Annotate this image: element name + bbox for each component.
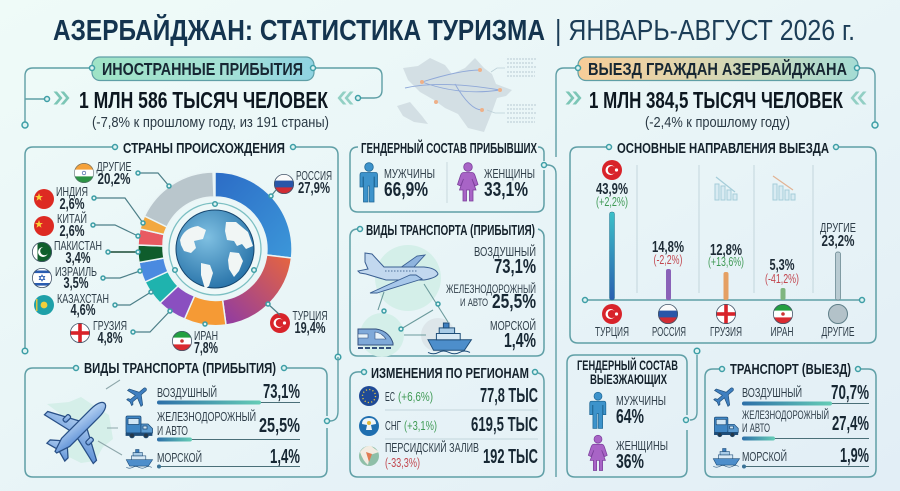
label: Georgia: 4,8% xyxy=(98,330,122,347)
label: India xyxy=(34,184,145,225)
column: Iran: 5,3% xyxy=(770,257,794,274)
label: Turkey xyxy=(266,302,328,337)
stat: sea: МОРСКОЙ xyxy=(490,318,536,333)
label: Turkey: ТУРЦИЯ xyxy=(292,308,328,323)
row: sea: 1,9% xyxy=(840,445,869,467)
row: sea: МОРСКОЙ xyxy=(742,449,787,464)
label: Russia xyxy=(269,168,332,198)
row: EU: ЕС xyxy=(385,389,395,404)
section header: foreign arrivals: 1 МЛН 586 ТЫСЯЧ ЧЕЛОВЕК xyxy=(79,87,329,113)
row: rail and road: 27,4% xyxy=(832,413,869,435)
heading: regions: ИЗМЕНЕНИЯ ПО РЕГИОНАМ xyxy=(371,366,529,382)
row: rail and road xyxy=(714,407,869,440)
label: others xyxy=(74,159,171,188)
row: EU: (+6,6%) xyxy=(398,390,433,404)
map of Azerbaijan xyxy=(397,58,536,132)
row: rail and road: И АВТО xyxy=(742,421,770,435)
row: rail and road: ЖЕЛЕЗНОДОРОЖНЫЙ xyxy=(157,409,256,424)
column: Georgia xyxy=(708,177,744,339)
column: others: ДРУГИЕ xyxy=(822,324,855,339)
row: Persian Gulf: 192 ТЫС xyxy=(483,446,538,468)
label: China: 2,6% xyxy=(60,223,84,240)
label: Kazakhstan: 4,6% xyxy=(70,302,96,319)
female stat: 36% xyxy=(616,451,644,473)
column: Turkey: ТУРЦИЯ xyxy=(595,324,629,339)
column: Georgia: 12,8% xyxy=(710,242,742,259)
heading: gender arrivals: ГЕНДЕРНЫЙ СОСТАВ ПРИБЫВШИХ xyxy=(361,139,537,157)
stat: sea: 1,4% xyxy=(504,330,536,352)
label: India: ИНДИЯ xyxy=(56,184,88,199)
panel: main departure destinations xyxy=(570,141,876,343)
label: China xyxy=(34,211,140,240)
heading: gender departing xyxy=(577,358,678,387)
panel: transport arrivals left xyxy=(25,357,338,477)
illustration: plane train ship xyxy=(358,245,471,357)
row: sea xyxy=(126,446,300,468)
column: Russia: (-2,2%) xyxy=(654,253,682,267)
row: air: ВОЗДУШНЫЙ xyxy=(742,385,802,400)
label: Pakistan: 3,4% xyxy=(66,250,90,267)
panel: gender of departing xyxy=(567,348,700,477)
male stat: МУЖЧИНЫ xyxy=(616,393,666,408)
female stat: 33,1% xyxy=(484,179,528,201)
label: Iran: ИРАН xyxy=(194,328,218,343)
female stat: ЖЕНЩИНЫ xyxy=(484,166,535,181)
male stat xyxy=(590,392,666,428)
row: CIS: 619,5 ТЫС xyxy=(471,414,538,436)
row: sea: МОРСКОЙ xyxy=(157,450,202,465)
label: Pakistan: ПАКИСТАН xyxy=(54,238,102,253)
row: rail and road xyxy=(126,409,300,442)
column: Turkey: 43,9% xyxy=(596,181,628,198)
column: others: 23,2% xyxy=(822,233,854,250)
label: Pakistan xyxy=(32,238,140,267)
heading: countries: СТРАНЫ ПРОИСХОЖДЕНИЯ xyxy=(123,141,285,157)
label: Israel xyxy=(32,264,142,292)
row: EU: 77,8 ТЫС xyxy=(480,385,538,407)
label: Georgia xyxy=(70,309,172,347)
column: Russia: РОССИЯ xyxy=(652,324,686,339)
column: Georgia: ГРУЗИЯ xyxy=(710,324,742,339)
row: Persian Gulf: (-33,3%) xyxy=(385,456,420,470)
label: others: ДРУГИЕ xyxy=(96,159,132,174)
panel: transport departures xyxy=(705,362,876,477)
section header: citizens departure xyxy=(556,57,878,157)
female stat xyxy=(458,163,535,201)
female stat xyxy=(588,435,668,473)
row: rail and road: ЖЕЛЕЗНОДОРОЖНЫЙ xyxy=(742,407,829,422)
row: air: ВОЗДУШНЫЙ xyxy=(157,385,217,400)
section header: foreign arrivals: ИНОСТРАННЫЕ ПРИБЫТИЯ xyxy=(102,59,303,79)
column: Russia xyxy=(652,239,686,339)
column: Iran: (-41,2%) xyxy=(765,272,799,286)
panel: countries of origin xyxy=(22,141,341,360)
male stat xyxy=(360,163,435,202)
label: India: 2,6% xyxy=(60,196,84,213)
column: Iran: ИРАН xyxy=(770,324,794,339)
female stat: ЖЕНЩИНЫ xyxy=(616,438,668,453)
column: Turkey xyxy=(595,160,629,339)
section header: citizens departure: (-2,4% к прошлому году) xyxy=(645,115,790,131)
stat: rail and road xyxy=(446,281,536,313)
column: Iran xyxy=(765,176,799,339)
column: others xyxy=(820,220,856,339)
label: Kazakhstan: КАЗАХСТАН xyxy=(57,291,109,306)
row: air xyxy=(710,381,869,411)
row: rail and road: 25,5% xyxy=(259,415,300,437)
panel: regional changes xyxy=(350,366,544,477)
male stat: МУЖЧИНЫ xyxy=(384,166,435,181)
stat: rail and road: И АВТО xyxy=(460,297,488,309)
label: Israel: 3,5% xyxy=(64,275,88,292)
stat: air: ВОЗДУШНЫЙ xyxy=(474,244,536,259)
row: air: 70,7% xyxy=(831,382,869,404)
heading: transport arrivals: ВИДЫ ТРАНСПОРТА (ПРИБЫТИЯ) xyxy=(84,361,276,377)
label: Georgia: ГРУЗИЯ xyxy=(93,318,127,333)
row: sea xyxy=(713,445,869,468)
icon: big plane over map xyxy=(31,379,129,477)
heading: gender departing: ВЫЕЗЖАЮЩИХ xyxy=(590,372,667,387)
heading: transport middle: ВИДЫ ТРАНСПОРТА (ПРИБЫТИЯ) xyxy=(366,223,535,239)
label: others: 20,2% xyxy=(98,171,130,188)
column: Russia: 14,8% xyxy=(652,239,684,256)
column: Turkey: (+2,2%) xyxy=(596,195,628,209)
title xyxy=(53,13,855,47)
row: CIS: (+3,1%) xyxy=(404,419,437,433)
row: CIS: СНГ xyxy=(385,418,401,433)
panel: transport arrivals middle xyxy=(350,223,544,357)
donut chart xyxy=(138,172,292,326)
column: Georgia: (+13,6%) xyxy=(708,255,744,269)
section header: foreign arrivals: (-7,8% к прошлому году, из 191 страны) xyxy=(92,115,329,131)
row: CIS xyxy=(359,414,538,436)
male stat: 64% xyxy=(616,406,644,428)
stat: air: 73,1% xyxy=(494,256,536,278)
heading: gender departing: ГЕНДЕРНЫЙ СОСТАВ xyxy=(577,358,678,373)
section header: foreign arrivals xyxy=(22,57,382,131)
row: EU xyxy=(359,385,538,407)
stat: rail and road: ЖЕЛЕЗНОДОРОЖНЫЙ xyxy=(446,281,536,296)
label: Kazakhstan xyxy=(34,290,153,319)
row: Persian Gulf xyxy=(359,440,538,470)
label: Iran xyxy=(172,322,218,357)
icon: globe xyxy=(169,202,261,295)
label: Russia: РОССИЯ xyxy=(296,168,332,183)
heading: destinations: ОСНОВНЫЕ НАПРАВЛЕНИЯ ВЫЕЗДА xyxy=(617,141,829,157)
panel: gender of arrivals xyxy=(350,139,556,477)
title: | ЯНВАРЬ-АВГУСТ 2026 г. xyxy=(555,15,855,47)
row: Persian Gulf: ПЕРСИДСКИЙ ЗАЛИВ xyxy=(385,440,479,455)
label: Iran: 7,8% xyxy=(194,340,218,357)
row: air: 73,1% xyxy=(263,381,300,403)
label: Israel: ИЗРАИЛЬ xyxy=(55,264,97,279)
label: Turkey: 19,4% xyxy=(294,320,326,337)
column: others: ДРУГИЕ xyxy=(820,220,856,235)
title: АЗЕРБАЙДЖАН: СТАТИСТИКА ТУРИЗМА xyxy=(53,13,545,47)
stat: air xyxy=(474,244,536,278)
label: Russia: 27,9% xyxy=(298,180,330,197)
row: rail and road: И АВТО xyxy=(157,423,188,438)
stat: sea xyxy=(490,318,536,352)
heading: transport departures: ТРАНСПОРТ (ВЫЕЗД) xyxy=(730,362,851,378)
row: air xyxy=(123,381,300,411)
section header: citizens departure: ВЫЕЗД ГРАЖДАН АЗЕРБАЙДЖАНА xyxy=(588,58,847,79)
stat: rail and road: 25,5% xyxy=(492,291,536,313)
label: China: КИТАЙ xyxy=(57,211,87,226)
male stat: 66,9% xyxy=(384,179,428,201)
row: sea: 1,4% xyxy=(270,446,300,468)
